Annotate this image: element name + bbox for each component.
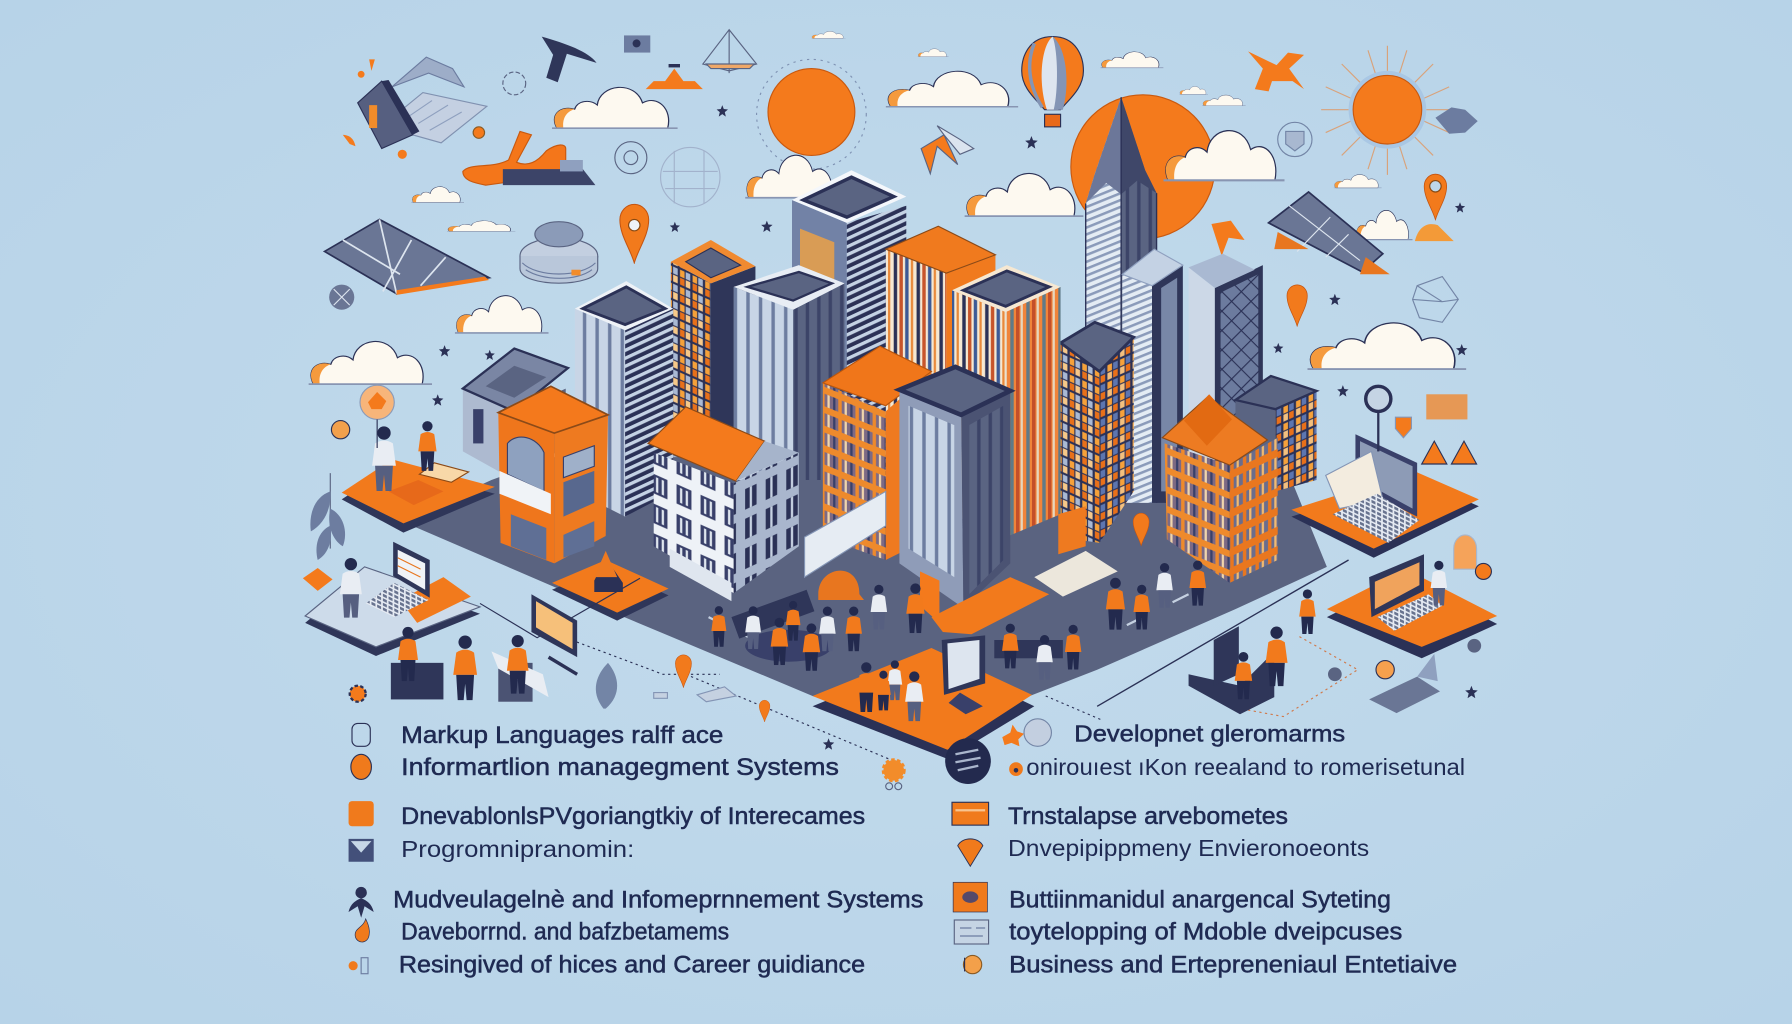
icon: orange mound and star <box>1211 221 1454 256</box>
icon: network ring <box>503 72 720 207</box>
platform: left laptop desk <box>305 542 480 656</box>
plant, pin and small objects <box>596 655 834 750</box>
decorative stars <box>432 105 1467 406</box>
list item: development environments: Dnvepipippmeny Envieronoeonts <box>1008 835 1369 861</box>
icon: flower badge <box>350 686 366 702</box>
list item: interecames: DnevablonlsPVgoriangtkiy of Interecames <box>401 803 865 830</box>
platform: right lower computer <box>1327 554 1497 658</box>
tower: dark grid colour <box>1061 322 1134 543</box>
list item: mobile development: toytelopping of Mdoble dveipcuses <box>1009 918 1402 945</box>
sun right with rays <box>1321 46 1454 175</box>
text panel: left list <box>349 686 923 979</box>
building: orange storefront <box>498 386 608 563</box>
icon: orange gear near text <box>883 760 904 790</box>
building: back right gray <box>1235 376 1317 491</box>
ground road <box>411 343 1327 743</box>
orange sun left <box>757 59 866 169</box>
list item: business and entrepreneurial: Business and Ertepreneniaul Entetiaive <box>1009 952 1457 979</box>
icon: dark glider <box>542 37 597 82</box>
icon: tent <box>703 30 757 73</box>
icon: location pin orange <box>620 204 649 263</box>
icon: globe outlines <box>1278 122 1458 322</box>
list item: dashboards: Daveborrnd. and bafzbetamems <box>401 918 729 945</box>
icon: location pins right <box>1287 174 1447 326</box>
tower: blue-gray <box>734 265 845 480</box>
list item: multilingual systems: Mudveulagelnè and Infomeprnnement Systems <box>393 886 923 913</box>
list item: buttiinmanidul: Buttiinmanidul anargencal Syteting <box>1009 886 1391 913</box>
icons: right badges <box>1454 535 1491 698</box>
plaza base under dark tower <box>931 577 1049 634</box>
tower: left slate <box>575 281 673 517</box>
icon: small orange diamond <box>303 568 333 591</box>
people: street group left <box>711 583 925 671</box>
building: back left gray <box>463 349 568 480</box>
tower: orange trim stripes <box>952 265 1061 537</box>
text panel: right list <box>945 719 1465 979</box>
list item: markup languages: Markup Languages ralff ace <box>401 722 723 749</box>
icon: right laptop with orange disc <box>1328 654 1440 713</box>
clouds <box>309 31 1466 384</box>
list item: programming: Progromnipranomin: <box>401 836 634 862</box>
icon: small plane orange <box>1248 51 1304 91</box>
illustration: sky objects <box>309 30 1478 406</box>
banner and arch <box>805 491 886 600</box>
icon: small rocket right of sun <box>1435 107 1478 134</box>
plant decoration <box>310 473 345 560</box>
icon: small photo tag <box>624 35 650 53</box>
icon: drone <box>921 126 974 174</box>
building: front orange windows <box>823 346 931 560</box>
icon: orange temple <box>646 64 703 89</box>
list item: development programs: Developnet gleromarms <box>1074 721 1345 747</box>
monitor <box>531 594 577 674</box>
paving <box>1034 551 1118 597</box>
orange arch behind street <box>1058 506 1086 554</box>
list item: development environments <box>958 835 1369 866</box>
icon: orange star and gray bulb <box>1002 719 1051 746</box>
list item: career guidance: Resingived of hices and Career guidiance <box>399 952 865 979</box>
platform: bottom orange plaza <box>813 635 1034 759</box>
platform: right top laptop <box>1291 434 1479 558</box>
icon: open book <box>343 57 487 159</box>
list item: information management: Informartlion managegment Systems <box>401 754 839 781</box>
people: street group right <box>994 561 1206 680</box>
tower: orange-trim colourful <box>671 240 755 457</box>
tower: orange roof colour stripes <box>886 226 995 480</box>
people: left workstation <box>391 594 577 702</box>
hot air balloon <box>1022 37 1083 127</box>
building: right orange bookshop <box>1162 394 1278 583</box>
platform: top-left workspace <box>342 421 495 533</box>
building: white with orange roof <box>648 407 799 601</box>
icon: round data cylinder <box>520 222 598 283</box>
icon: dark circle <box>945 738 991 784</box>
icon: folded map left <box>325 219 489 310</box>
pin on street <box>1133 513 1149 546</box>
list item: environment sentence: onirouıest ıKon reealand to romerisetunal <box>1026 754 1465 780</box>
people: right workstation <box>1189 589 1316 714</box>
desks and people <box>391 627 549 702</box>
tower: right light <box>1122 249 1183 503</box>
tower: spire <box>1086 97 1157 503</box>
icon: right map <box>1269 192 1390 274</box>
list item: trnstalapse: Trnstalapse arvebometes <box>1008 803 1288 830</box>
tower: back dark <box>792 170 906 480</box>
large orange disc behind spire <box>1071 95 1215 239</box>
platform: small orange with tent <box>552 551 669 621</box>
icons: right mini set <box>1366 386 1477 464</box>
tower: front dark <box>899 367 1010 623</box>
connector lines <box>480 560 1358 760</box>
road markings <box>709 594 1189 640</box>
icon: orange plane with console <box>463 131 595 185</box>
tower: right diamond glass <box>1189 254 1263 491</box>
icon: orange bubble and pin <box>331 385 394 448</box>
